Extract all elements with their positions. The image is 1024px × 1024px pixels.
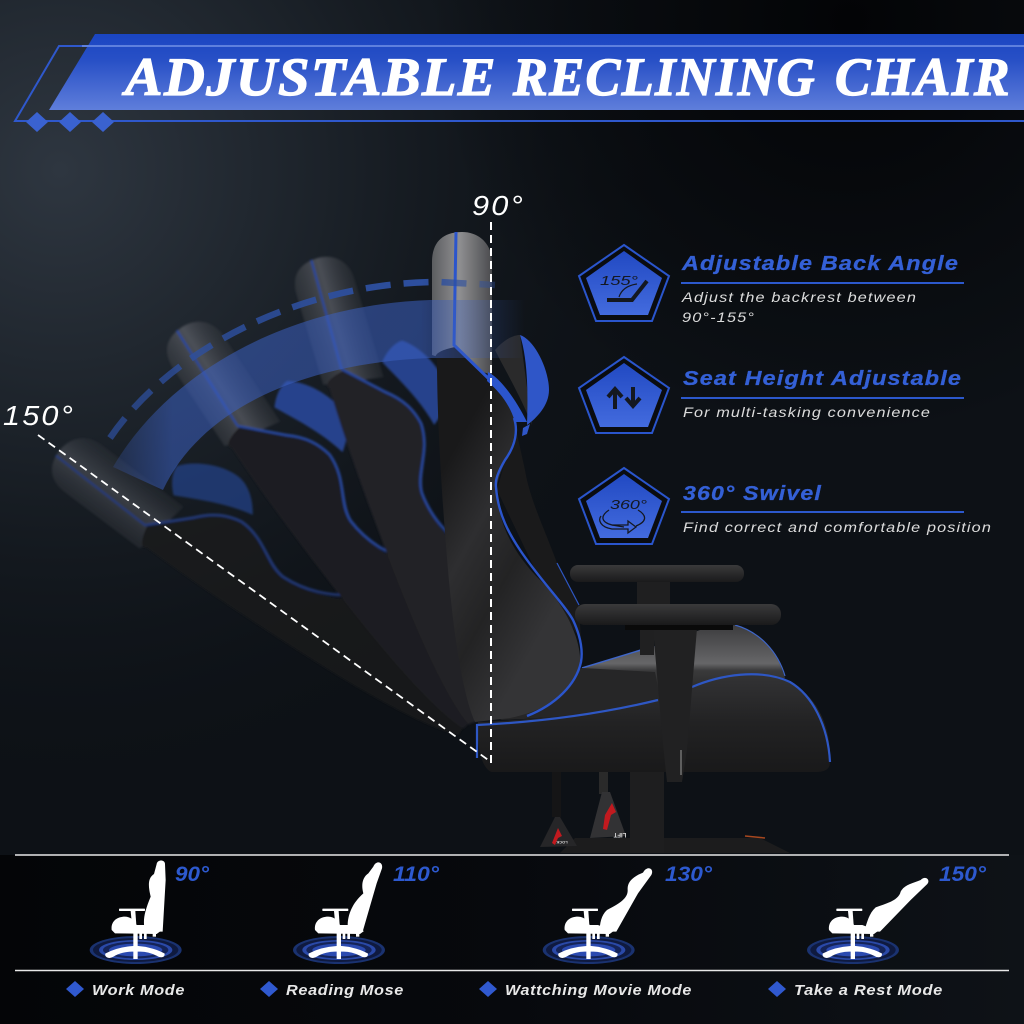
title: RECLINING [512, 47, 816, 107]
icon: up and down arrows [579, 357, 669, 433]
chair base and levers: LIFT [613, 831, 626, 837]
dashed arc [110, 282, 495, 438]
icon: 155 degree pentagon: 155° [600, 273, 638, 288]
feature: seat height adjustable [579, 357, 964, 433]
description: For multi-tasking convenience [683, 404, 931, 420]
heading: 360° Swivel [683, 483, 822, 505]
chair mode 110 [293, 862, 385, 964]
chair base and levers: LOCK [556, 840, 568, 845]
modes strip [15, 855, 1009, 999]
lower armrest [575, 604, 781, 782]
icon: swivel [579, 468, 669, 544]
blue piping [454, 232, 582, 716]
angle labels: 130° [665, 863, 713, 886]
chair mode 150 [807, 878, 928, 964]
title: CHAIR [835, 47, 1011, 107]
mode legend: Wattching Movie Mode [505, 982, 692, 999]
heading: Seat Height Adjustable [683, 368, 962, 390]
headrest top [432, 232, 492, 375]
feature: adjustable back angle: 90°-155° [682, 309, 755, 325]
description: Adjust the backrest between [681, 289, 917, 305]
recline arc band [113, 300, 525, 490]
description: Find correct and comfortable position [683, 519, 992, 535]
title banner [15, 34, 1024, 132]
label 150 degrees: 150° [3, 400, 75, 431]
mode legend [66, 981, 943, 999]
dashed angle line 150 [38, 435, 491, 762]
far seat cushion [582, 625, 785, 700]
feature: adjustable back angle [579, 245, 964, 325]
title: ADJUSTABLE [122, 47, 497, 107]
icon: 155 degree pentagon [579, 245, 669, 321]
icon: swivel: 360° [610, 497, 647, 512]
feature: 360 swivel [579, 468, 992, 544]
mode legend: Work Mode [92, 982, 185, 999]
label 90 degrees: 90° [472, 190, 525, 221]
seat back body [436, 347, 580, 722]
seat back side [497, 425, 581, 640]
upper armrest [570, 565, 744, 655]
angle labels: 90° [175, 863, 210, 886]
lumbar pillow [495, 335, 549, 436]
chair mode 90 [90, 860, 182, 964]
heading: Adjustable Back Angle [681, 253, 959, 275]
angle labels: 150° [939, 863, 987, 886]
ghost chair backs in motion [41, 225, 570, 769]
chair base and levers [540, 772, 790, 853]
main chair [432, 232, 830, 853]
angle labels [175, 863, 987, 886]
mode legend: Reading Mose [286, 982, 404, 999]
chair mode 130 [543, 868, 652, 964]
title [122, 47, 1011, 107]
mode legend: Take a Rest Mode [794, 982, 943, 999]
angle labels: 110° [393, 863, 440, 886]
dashed angle line 90 [490, 222, 492, 768]
front seat cushion [478, 674, 830, 772]
